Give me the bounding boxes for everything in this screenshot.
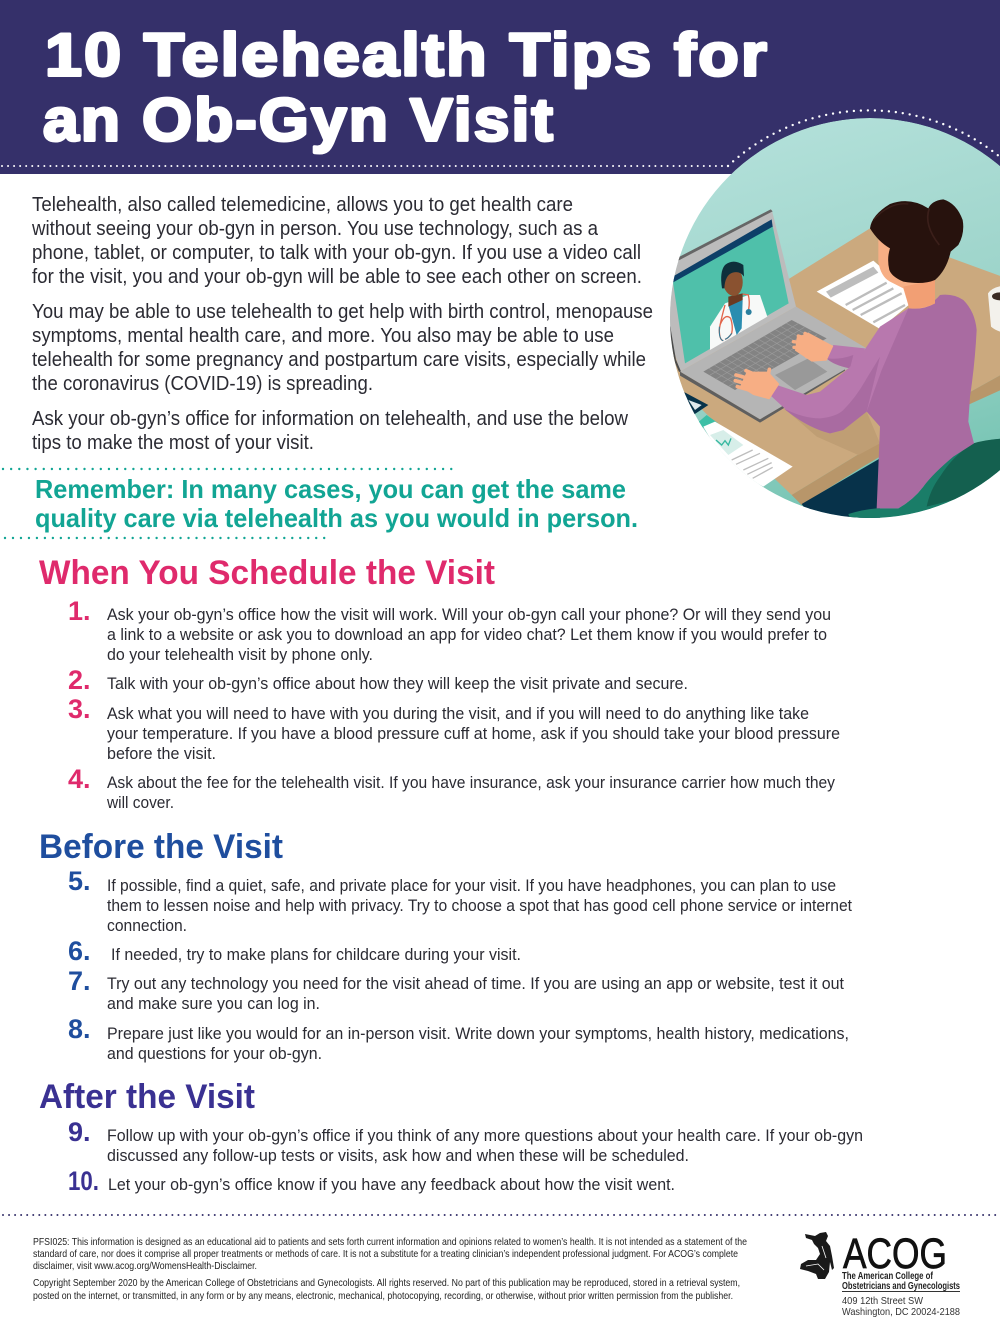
list: schedule tips 1-4: your temperature. If you have a blood pressure cuff at home, ask if you should take your blood pressure bbox=[107, 725, 840, 743]
list: before tips 5-8: 7. bbox=[68, 966, 91, 996]
disclaimer text: standard of care, nor does it comprise all proper treatments or methods of care. It is not a substitute for a treating clinician’s independent professional judgment. For ACOG’s complete bbox=[33, 1249, 738, 1260]
ACOG logo: 409 12th Street SW bbox=[842, 1295, 923, 1307]
heading: after the visit: After the Visit bbox=[39, 1078, 255, 1116]
far arm bbox=[827, 345, 865, 368]
list: before tips 5-8: and questions for your ob-gyn. bbox=[107, 1045, 322, 1063]
list: after tips 9-10: Follow up with your ob-gyn’s office if you think of any more questions about your health care. If your ob-gyn bbox=[107, 1127, 863, 1145]
near hand bbox=[735, 369, 779, 399]
list: before tips 5-8: connection. bbox=[107, 917, 187, 935]
near arm bbox=[770, 308, 908, 433]
disclaimer text: posted on the internet, or transmitted, in any form or by any means, electronic, mechanical, photocopying, recording, or otherwise, without prior written permission from the publisher. bbox=[33, 1291, 733, 1302]
callout: quality care via telehealth as you would in person. bbox=[35, 503, 638, 533]
list: schedule tips 1-4: will cover. bbox=[106, 794, 174, 812]
intro text: phone, tablet, or computer, to talk with your ob-gyn. If you use a video call bbox=[32, 242, 641, 264]
callout bbox=[3, 469, 638, 538]
laptop bbox=[668, 209, 867, 423]
ACOG logo: Washington, DC 20024-2188 bbox=[842, 1306, 960, 1318]
intro text: without seeing your ob-gyn in person. You use technology, such as a bbox=[31, 218, 599, 240]
list: before tips 5-8: 5. bbox=[68, 866, 91, 896]
list: before tips 5-8: Prepare just like you would for an in-person visit. Write down your symptoms, health history, medications, bbox=[107, 1025, 849, 1043]
list: before tips 5-8: them to lessen noise and help with privacy. Try to choose a spot that has good cell phone service or internet bbox=[107, 897, 852, 915]
ACOG logo bbox=[800, 1230, 960, 1318]
list: schedule tips 1-4: 4. bbox=[68, 764, 91, 794]
list: before tips 5-8: 8. bbox=[68, 1014, 91, 1044]
ACOG logo: Obstetricians and Gynecologists bbox=[842, 1281, 960, 1292]
list: after tips 9-10: discussed any follow-up tests or visits, ask how and when these will be scheduled. bbox=[107, 1147, 689, 1165]
list: before tips 5-8: Try out any technology you need for the visit ahead of time. If you are using an app or website, test it out bbox=[107, 975, 844, 993]
illustration: telehealth video visit bbox=[670, 118, 1000, 518]
list: schedule tips 1-4: 3. bbox=[68, 694, 91, 724]
disclaimer text: PFSI025: This information is designed as an educational aid to patients and sets forth current information and opinions related to women’s health. It is not intended as a statement of the bbox=[33, 1237, 747, 1248]
intro text bbox=[31, 194, 653, 454]
list: schedule tips 1-4: before the visit. bbox=[107, 745, 216, 763]
list: schedule tips 1-4: Ask your ob-gyn’s office how the visit will work. Will your ob-gyn call your phone? Or will they send you bbox=[107, 606, 831, 624]
list: after tips 9-10 bbox=[68, 1117, 863, 1196]
list: schedule tips 1-4: Talk with your ob-gyn’s office about how they will keep the visit private and secure. bbox=[107, 675, 688, 693]
disclaimer text: disclaimer, visit www.acog.org/WomensHealth-Disclaimer. bbox=[33, 1261, 257, 1272]
list: after tips 9-10: Let your ob-gyn’s office know if you have any feedback about how the visit went. bbox=[108, 1176, 675, 1194]
desk bbox=[653, 228, 1000, 530]
intro text: the coronavirus (COVID-19) is spreading. bbox=[32, 373, 373, 395]
list: after tips 9-10: 9. bbox=[68, 1117, 91, 1147]
intro text: You may be able to use telehealth to get help with birth control, menopause bbox=[32, 301, 653, 323]
list: schedule tips 1-4 bbox=[68, 596, 840, 812]
list: before tips 5-8: If possible, find a quiet, safe, and private place for your visit. If you have headphones, you can plan to use bbox=[107, 877, 836, 895]
doctor on screen bbox=[710, 262, 767, 350]
intro text: symptoms, mental health care, and more. You also may be able to use bbox=[32, 325, 614, 347]
coffee cup bbox=[988, 285, 1000, 333]
intro text: Ask your ob-gyn’s office for information on telehealth, and use the below bbox=[32, 408, 629, 430]
list: before tips 5-8: If needed, try to make plans for childcare during your visit. bbox=[111, 946, 521, 964]
intro text: for the visit, you and your ob-gyn will be able to see each other on screen. bbox=[32, 266, 642, 288]
neck and face bbox=[878, 237, 935, 309]
list: schedule tips 1-4: Ask what you will need to have with you during the visit, and if you will need to do anything like take bbox=[107, 705, 809, 723]
list: schedule tips 1-4: 1. bbox=[68, 596, 91, 626]
disclaimer text: Copyright September 2020 by the American College of Obstetricians and Gynecologists. All rights reserved. No part of this publication may be reproduced, stored in a retrieval system, bbox=[33, 1278, 740, 1289]
intro text: Telehealth, also called telemedicine, allows you to get health care bbox=[32, 194, 573, 216]
list: schedule tips 1-4: a link to a website or ask you to download an app for video chat? Let them know if you would prefer to bbox=[107, 626, 827, 644]
list: before tips 5-8: 6. bbox=[68, 936, 91, 966]
heading: before the visit: Before the Visit bbox=[39, 828, 283, 866]
heading: when you schedule the visit: When You Schedule the Visit bbox=[39, 554, 495, 592]
title bbox=[43, 22, 769, 154]
intro text: telehealth for some pregnancy and postpartum care visits, especially while bbox=[32, 349, 646, 371]
header banner bbox=[0, 0, 1000, 174]
person bbox=[735, 199, 977, 508]
torso bbox=[860, 295, 977, 508]
icon: mother and child figure bbox=[800, 1232, 834, 1279]
ACOG logo: ACOG bbox=[843, 1230, 947, 1278]
list: after tips 9-10: 10. bbox=[68, 1166, 99, 1196]
list: schedule tips 1-4: 2. bbox=[68, 665, 91, 695]
chair bbox=[848, 438, 1000, 518]
far hand bbox=[793, 333, 833, 362]
paper on desk bbox=[817, 261, 917, 329]
list: schedule tips 1-4: do your telehealth visit by phone only. bbox=[107, 646, 373, 664]
list: before tips 5-8 bbox=[68, 866, 852, 1063]
callout: Remember: In many cases, you can get the same bbox=[35, 474, 626, 504]
title: an Ob-Gyn Visit bbox=[43, 86, 555, 154]
title: 10 Telehealth Tips for bbox=[45, 22, 769, 88]
hair bbox=[870, 199, 963, 283]
disclaimer text bbox=[33, 1237, 747, 1302]
lower papers and tablet bbox=[675, 392, 793, 487]
intro text: tips to make the most of your visit. bbox=[32, 432, 314, 454]
footer divider bbox=[3, 1214, 998, 1216]
ACOG logo: The American College of bbox=[842, 1271, 934, 1282]
list: before tips 5-8: and make sure you can log in. bbox=[107, 995, 320, 1013]
list: schedule tips 1-4: Ask about the fee for the telehealth visit. If you have insurance, ask your insurance carrier how much they bbox=[107, 774, 836, 792]
